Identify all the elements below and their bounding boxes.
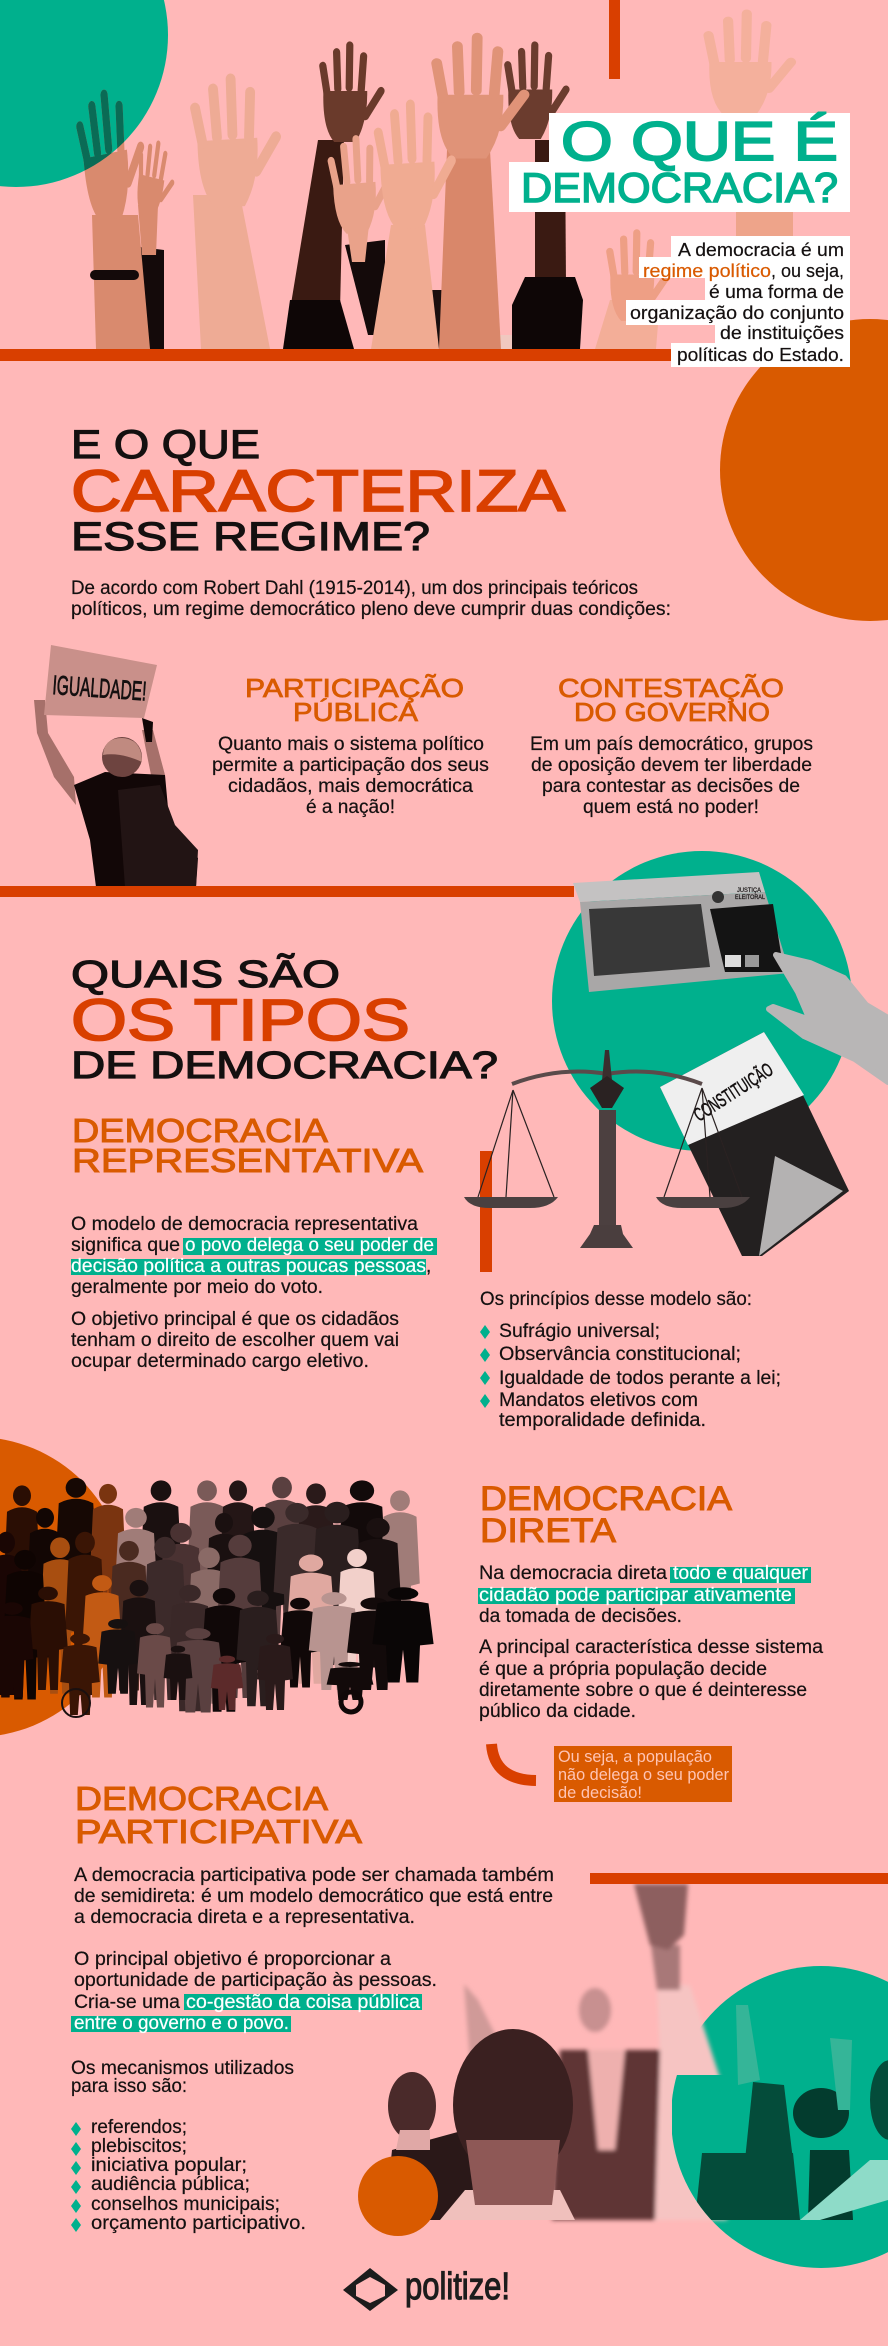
text: participativa: co-gestão da coisa pública: [186, 1992, 420, 2013]
text: direta: A principal característica desse sistema: [479, 1637, 823, 1658]
intro text block: , ou seja,: [771, 261, 844, 281]
list: mecanismos: conselhos municipais;: [91, 2194, 280, 2215]
intro paragraph: De acordo com Robert Dahl (1915-2014), um dos principais teóricos: [71, 578, 638, 599]
orange circle left: [0, 1437, 126, 1737]
text: direta: Na democracia direta: [479, 1563, 667, 1584]
list: mecanismos: para isso são:: [71, 2076, 187, 2097]
title: [509, 110, 850, 212]
horizontal bar: [0, 349, 672, 361]
text: representativa: tenham o direito de escolher quem vai: [71, 1330, 399, 1351]
column: contestação do governo: quem está no poder!: [583, 797, 759, 818]
column: participação pública: é a nação!: [306, 797, 395, 818]
list: princípios: Os princípios desse modelo são:: [480, 1289, 752, 1310]
list: mecanismos: Os mecanismos utilizados: [71, 2058, 294, 2079]
text: direta: da tomada de decisões.: [479, 1606, 682, 1627]
text: participativa: a democracia direta e a representativa.: [74, 1907, 415, 1928]
column: participação pública: PARTICIPAÇÃO: [245, 673, 464, 703]
text: direta: todo e qualquer: [673, 1563, 809, 1584]
photo: raised hands: [77, 14, 793, 349]
horizontal bar: [0, 886, 574, 897]
list: mecanismos: orçamento participativo.: [91, 2213, 306, 2234]
subheading: democracia direta: DIRETA: [480, 1512, 616, 1550]
teal circle: [552, 851, 852, 1151]
callout: [554, 1746, 732, 1802]
photo: voting machine: [573, 872, 790, 992]
panel: tipos de democracia: [71, 851, 888, 1431]
title: O QUE É: [561, 110, 838, 172]
panel: democracia direta: [0, 1437, 823, 1802]
text: participativa: oportunidade de participação às pessoas.: [74, 1970, 437, 1991]
text: representativa: ocupar determinado cargo eletivo.: [71, 1351, 369, 1372]
photo: protester with sign: IGUALDADE!: [52, 670, 147, 707]
text: direta: [478, 1563, 823, 1722]
arrow: curved connector: [492, 1744, 536, 1780]
list: princípios: temporalidade definida.: [499, 1410, 706, 1431]
panel: characteristics: [34, 423, 813, 887]
text: representativa: significa que: [71, 1235, 180, 1256]
callout: de decisão!: [558, 1783, 642, 1802]
heading: E O QUE: [71, 423, 260, 467]
teal circle: [671, 1966, 888, 2268]
list: princípios: Sufrágio universal;: [499, 1321, 660, 1342]
intro text block: é uma forma de: [709, 282, 844, 302]
list: princípios: Igualdade de todos perante a lei;: [499, 1368, 781, 1389]
text: representativa: geralmente por meio do voto.: [71, 1277, 323, 1298]
intro paragraph: políticos, um regime democrático pleno deve cumprir duas condições:: [71, 599, 671, 620]
column: participação pública: Quanto mais o sistema político: [218, 734, 484, 755]
text: participativa: [71, 1865, 554, 2034]
orange circle right: [720, 319, 888, 621]
callout: Ou seja, a população: [558, 1747, 712, 1766]
list: mecanismos: referendos;: [91, 2117, 187, 2138]
text: direta: público da cidade.: [479, 1701, 636, 1722]
vertical accent bar: [609, 0, 620, 79]
text: direta: diretamente sobre o que é deinteresse: [479, 1680, 807, 1701]
logo: politize: [343, 2266, 510, 2311]
text: participativa: A democracia participativa pode ser chamada também: [74, 1865, 554, 1886]
text: participativa: entre o governo e o povo.: [74, 2013, 289, 2034]
photo: meeting with raised hands: [385, 1884, 888, 2220]
list: mecanismos: audiência pública;: [91, 2174, 250, 2195]
heading: [71, 423, 565, 559]
list: mecanismos: plebiscitos;: [91, 2136, 187, 2157]
text: direta: é que a própria população decide: [479, 1659, 767, 1680]
heading: OS TIPOS: [71, 988, 410, 1053]
text: direta: cidadão pode participar ativamente: [479, 1585, 792, 1606]
column: participação pública: [212, 673, 489, 818]
horizontal bar: [590, 1873, 888, 1884]
photo: voting machine: ELEITORAL: [735, 895, 766, 901]
intro text block: políticas do Estado.: [677, 345, 844, 365]
subheading: democracia participativa: DEMOCRACIA: [75, 1780, 328, 1817]
column: participação pública: PÚBLICA: [293, 697, 419, 727]
photo: constitution book: [660, 1032, 849, 1256]
column: participação pública: permite a participação dos seus: [212, 755, 489, 776]
heading: DE DEMOCRACIA?: [71, 1045, 498, 1087]
callout: não delega o seu poder: [558, 1765, 729, 1784]
subheading: democracia participativa: PARTICIPATIVA: [75, 1813, 362, 1850]
heading: CARACTERIZA: [71, 459, 565, 524]
text: representativa: ,: [426, 1256, 431, 1277]
illustration: crowd: [0, 1477, 434, 1717]
subheading: democracia direta: [480, 1480, 732, 1550]
text: representativa: [71, 1214, 437, 1372]
intro text block: de instituições: [720, 323, 844, 343]
title: DEMOCRACIA?: [521, 164, 838, 211]
subheading: democracia representativa: [72, 1112, 423, 1179]
text: representativa: O modelo de democracia representativa: [71, 1214, 418, 1235]
column: participação pública: cidadãos, mais democrática: [228, 776, 473, 797]
subheading: democracia representativa: DEMOCRACIA: [72, 1112, 328, 1149]
subheading: democracia representativa: REPRESENTATIVA: [72, 1142, 423, 1179]
heading: QUAIS SÃO: [71, 953, 340, 996]
list: mecanismos: iniciativa popular;: [91, 2155, 247, 2176]
vertical accent bar: [480, 1151, 492, 1272]
subheading: democracia direta: DEMOCRACIA: [480, 1480, 732, 1518]
column: contestação do governo: DO GOVERNO: [574, 697, 770, 727]
intro paragraph: [71, 578, 671, 620]
intro text block: A democracia é um: [678, 240, 844, 260]
heading: [71, 953, 498, 1087]
panel: democracia participativa: [71, 1780, 888, 2268]
heading: ESSE REGIME?: [71, 515, 430, 559]
list: mecanismos: [71, 2058, 306, 2234]
text: participativa: Cria-se uma: [74, 1992, 180, 2013]
list: princípios: Mandatos eletivos com: [499, 1390, 698, 1411]
photo: pointing hand: [769, 955, 888, 1082]
text: representativa: decisão política a outras poucas pessoas: [71, 1256, 426, 1277]
photo: protester with sign: [34, 645, 198, 887]
photo: constitution book: CONSTITUIÇÃO: [690, 1059, 777, 1126]
column: contestação do governo: [530, 673, 813, 818]
column: contestação do governo: de oposição devem ter liberdade: [531, 755, 812, 776]
orange circle: [358, 2156, 438, 2236]
text: representativa: o povo delega o seu poder de: [185, 1235, 434, 1256]
panel: hero: [0, 0, 888, 621]
photo: voting machine: JUSTIÇA: [737, 888, 761, 894]
intro text block: organização do conjunto: [630, 303, 844, 323]
subheading: democracia participativa: [75, 1780, 362, 1850]
text: participativa: de semidireta: é um modelo democrático que está entre: [74, 1886, 553, 1907]
photo: scales of justice: [464, 1050, 750, 1248]
teal circle top left: [0, 0, 168, 187]
text: participativa: O principal objetivo é proporcionar a: [74, 1949, 391, 1970]
logo: politize: politize!: [405, 2266, 510, 2308]
column: contestação do governo: para contestar as decisões de: [542, 776, 800, 797]
intro text block: regime político: [643, 261, 771, 281]
column: contestação do governo: Em um país democrático, grupos: [530, 734, 813, 755]
list: princípios: [480, 1289, 781, 1431]
intro text block: [626, 236, 850, 367]
text: representativa: O objetivo principal é que os cidadãos: [71, 1309, 399, 1330]
list: princípios: Observância constitucional;: [499, 1344, 741, 1365]
column: contestação do governo: CONTESTAÇÃO: [558, 673, 784, 703]
